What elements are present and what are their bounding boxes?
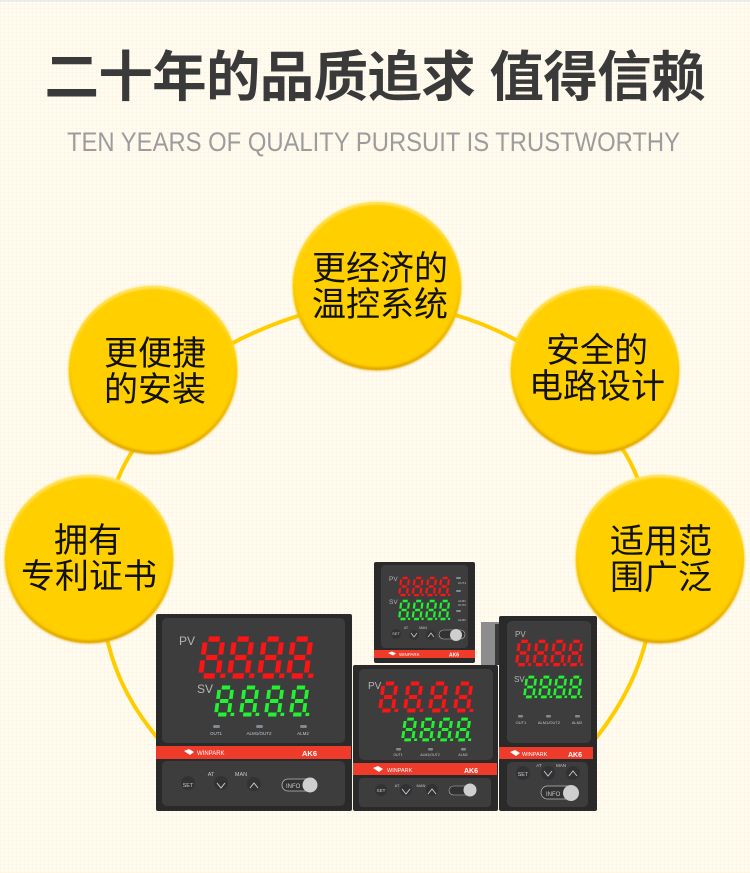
- device: large controller: SV: [197, 682, 213, 696]
- device: wide controller: ALM2: [458, 753, 468, 757]
- device: tall controller: SV: [514, 675, 525, 684]
- circle: safe: [511, 286, 679, 454]
- device: large controller: AK6: [302, 749, 317, 758]
- device: small square controller: SV: [389, 599, 398, 606]
- circle: patents: [5, 475, 173, 643]
- circle: wide application: 围广泛: [610, 559, 712, 597]
- connecting ring: [107, 314, 646, 741]
- device: small square controller: ALM2: [458, 618, 466, 622]
- subtitle: TEN YEARS OF QUALITY PURSUIT IS TRUSTWORTHY: [67, 127, 680, 157]
- device: small square controller: SET: [392, 631, 400, 636]
- device: wide controller: [353, 665, 498, 811]
- circle: patents: 拥有: [54, 522, 122, 560]
- device: tall controller: [499, 616, 597, 811]
- device: tall controller: OUT1: [516, 720, 527, 725]
- circle: patents: 专利证书: [21, 558, 157, 596]
- device: tall controller: ALM1/OUT2: [538, 720, 561, 725]
- circle: safe: 安全的: [546, 332, 648, 370]
- circle: safe: 电路设计: [529, 368, 665, 406]
- device: large controller: ALM2: [297, 731, 309, 736]
- circle: wide application: 适用范: [610, 523, 712, 561]
- device: small square controller: PV: [389, 576, 398, 583]
- device: tall controller: WINPARK: [522, 752, 548, 758]
- device: wide controller: AT: [395, 783, 400, 788]
- device: large controller: INFO: [286, 784, 301, 790]
- device: tall controller: ALM2: [572, 720, 583, 725]
- device: small square controller: [374, 562, 475, 663]
- device: rear housing: [481, 622, 499, 665]
- device: large controller: OUT1: [210, 731, 222, 736]
- device: wide controller: ALM1/OUT2: [420, 753, 440, 757]
- device: tall controller: AK6: [568, 752, 582, 759]
- circle: wide application: [576, 475, 744, 643]
- circle: more convenient: [69, 286, 237, 454]
- device: large controller: PV: [179, 634, 195, 648]
- device: wide controller: SET: [377, 788, 386, 793]
- device: large controller: WINPARK: [197, 751, 225, 757]
- device: tall controller: SET: [518, 772, 529, 778]
- device: tall controller: INFO: [546, 792, 561, 798]
- device: wide controller: AK6: [464, 768, 478, 775]
- device: wide controller: OUT1: [393, 753, 403, 757]
- device: wide controller: PV: [368, 681, 382, 692]
- device: wide controller: MAN: [417, 783, 426, 788]
- device: small square controller: WINPARK: [399, 652, 420, 657]
- device: large controller: AT: [208, 772, 215, 778]
- device: small square controller: ALM1: [458, 599, 466, 603]
- device: tall controller: MAN: [556, 763, 566, 768]
- device: large controller: ALM1/OUT2: [246, 731, 272, 736]
- device: small square controller: OUT1: [458, 581, 466, 585]
- circle: more convenient: 的安装: [104, 371, 206, 409]
- device: small square controller: MAN: [419, 626, 427, 630]
- device: tall controller: PV: [515, 630, 526, 639]
- circle: more economical: [293, 202, 461, 370]
- circle: more economical: 更经济的: [312, 250, 448, 288]
- device: large controller: [156, 614, 352, 811]
- device: small square controller: AT: [404, 626, 409, 630]
- device: wide controller: WINPARK: [387, 768, 413, 774]
- circle: more economical: 温控系统: [312, 286, 448, 324]
- device: small square controller: AK6: [449, 652, 459, 658]
- device: large controller: SET: [183, 783, 194, 789]
- device: tall controller: AT: [536, 763, 542, 768]
- circle: more convenient: 更便捷: [104, 335, 206, 373]
- device: small square controller: OUT2: [458, 603, 466, 607]
- title: 二十年的品质追求 值得信赖: [44, 47, 706, 108]
- device: large controller: MAN: [235, 772, 247, 778]
